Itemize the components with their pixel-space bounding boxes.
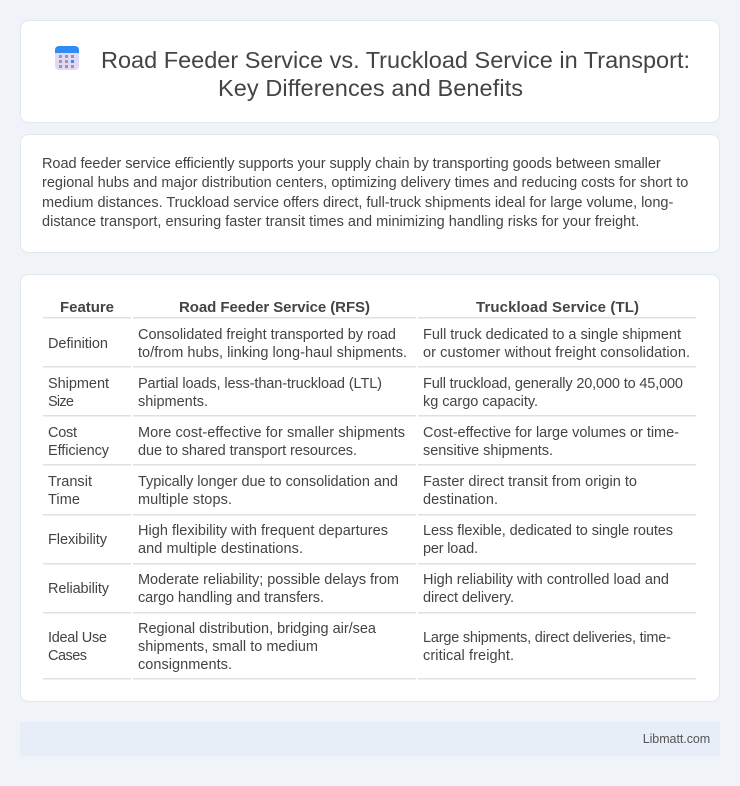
row: definition: Consolidated freight transported by road: [138, 327, 396, 343]
row: flexibility: per load.: [423, 541, 478, 557]
panel: title card: [20, 20, 720, 122]
row: reliability: Moderate reliability; possible delays from: [138, 572, 399, 588]
row: ideal use cases: Ideal Use: [48, 630, 107, 646]
row: reliability: High reliability with controlled load and: [423, 572, 669, 588]
row: cost efficiency: due to shared transport resources.: [138, 443, 357, 459]
row: reliability: direct delivery.: [423, 590, 514, 606]
row: shipment size: Size: [48, 394, 74, 410]
row: definition: Definition: [48, 336, 108, 352]
row: ideal use cases: [48, 621, 671, 673]
row: cost efficiency: [48, 425, 679, 459]
row: flexibility: Less flexible, dedicated to single routes: [423, 523, 673, 539]
table header: Truckload Service (TL): [476, 299, 639, 316]
text block: introduction: Road feeder service efficiently supports your supply chain by transporting goods between smaller: [42, 156, 661, 172]
row: transit time: Typically longer due to consolidation and: [138, 474, 398, 490]
row: reliability: cargo handling and transfers.: [138, 590, 324, 606]
row: flexibility: High flexibility with frequent departures: [138, 523, 388, 539]
text block: introduction: medium distances. Truckload service offers direct, full-truck shipments ideal for large volume, long-: [42, 195, 673, 211]
row: shipment size: shipments.: [138, 394, 208, 410]
title: Road Feeder Service vs. Truckload Service in Transport:: [101, 47, 690, 73]
table header: Feature: [60, 299, 114, 316]
row: ideal use cases: consignments.: [138, 657, 232, 673]
table header: Road Feeder Service (RFS): [179, 299, 370, 316]
row: reliability: [48, 572, 669, 606]
text block: introduction: regional hubs and major distribution centers, optimizing delivery times and reducing costs for short to: [42, 175, 688, 191]
footer: [20, 722, 720, 756]
panel: introduction: [20, 134, 720, 252]
row: transit time: destination.: [423, 492, 498, 508]
row: cost efficiency: Cost: [48, 425, 77, 441]
text block: introduction: distance transport, ensuring faster transit times and minimizing handling risks for your freight.: [42, 214, 639, 230]
row: cost efficiency: Cost-effective for large volumes or time-: [423, 425, 679, 441]
row: reliability: Reliability: [48, 581, 110, 597]
title: Key Differences and Benefits: [218, 75, 523, 101]
row: ideal use cases: Large shipments, direct deliveries, time-: [423, 630, 671, 646]
row: flexibility: [48, 523, 673, 557]
row: transit time: Faster direct transit from origin to: [423, 474, 637, 490]
row: shipment size: [48, 376, 683, 410]
row: cost efficiency: More cost-effective for smaller shipments: [138, 425, 405, 441]
row: definition: or customer without freight consolidation.: [423, 345, 690, 361]
row: definition: [48, 327, 690, 361]
row: transit time: [48, 474, 637, 508]
row: shipment size: Shipment: [48, 376, 109, 392]
row: ideal use cases: shipments, small to medium: [138, 639, 318, 655]
row: shipment size: kg cargo capacity.: [423, 394, 538, 410]
row: ideal use cases: Regional distribution, bridging air/sea: [138, 621, 377, 637]
row: cost efficiency: sensitive shipments.: [423, 443, 553, 459]
footer: Libmatt.com: [643, 732, 710, 746]
row: ideal use cases: Cases: [48, 648, 87, 664]
row: cost efficiency: Efficiency: [48, 443, 110, 459]
row: flexibility: and multiple destinations.: [138, 541, 303, 557]
panel: comparison table: [20, 274, 720, 702]
text block: introduction: [42, 156, 688, 230]
icon: calendar: [55, 46, 79, 70]
row: definition: to/from hubs, linking long-haul shipments.: [138, 345, 407, 361]
row: ideal use cases: critical freight.: [423, 648, 514, 664]
table header: [60, 299, 639, 316]
row: transit time: multiple stops.: [138, 492, 232, 508]
row: transit time: Transit: [48, 474, 92, 490]
title: [101, 47, 690, 101]
row: shipment size: Full truckload, generally 20,000 to 45,000: [423, 376, 683, 392]
row: transit time: Time: [48, 492, 80, 508]
row: definition: Full truck dedicated to a single shipment: [423, 327, 681, 343]
row: flexibility: Flexibility: [48, 532, 108, 548]
row: shipment size: Partial loads, less-than-truckload (LTL): [138, 376, 382, 392]
